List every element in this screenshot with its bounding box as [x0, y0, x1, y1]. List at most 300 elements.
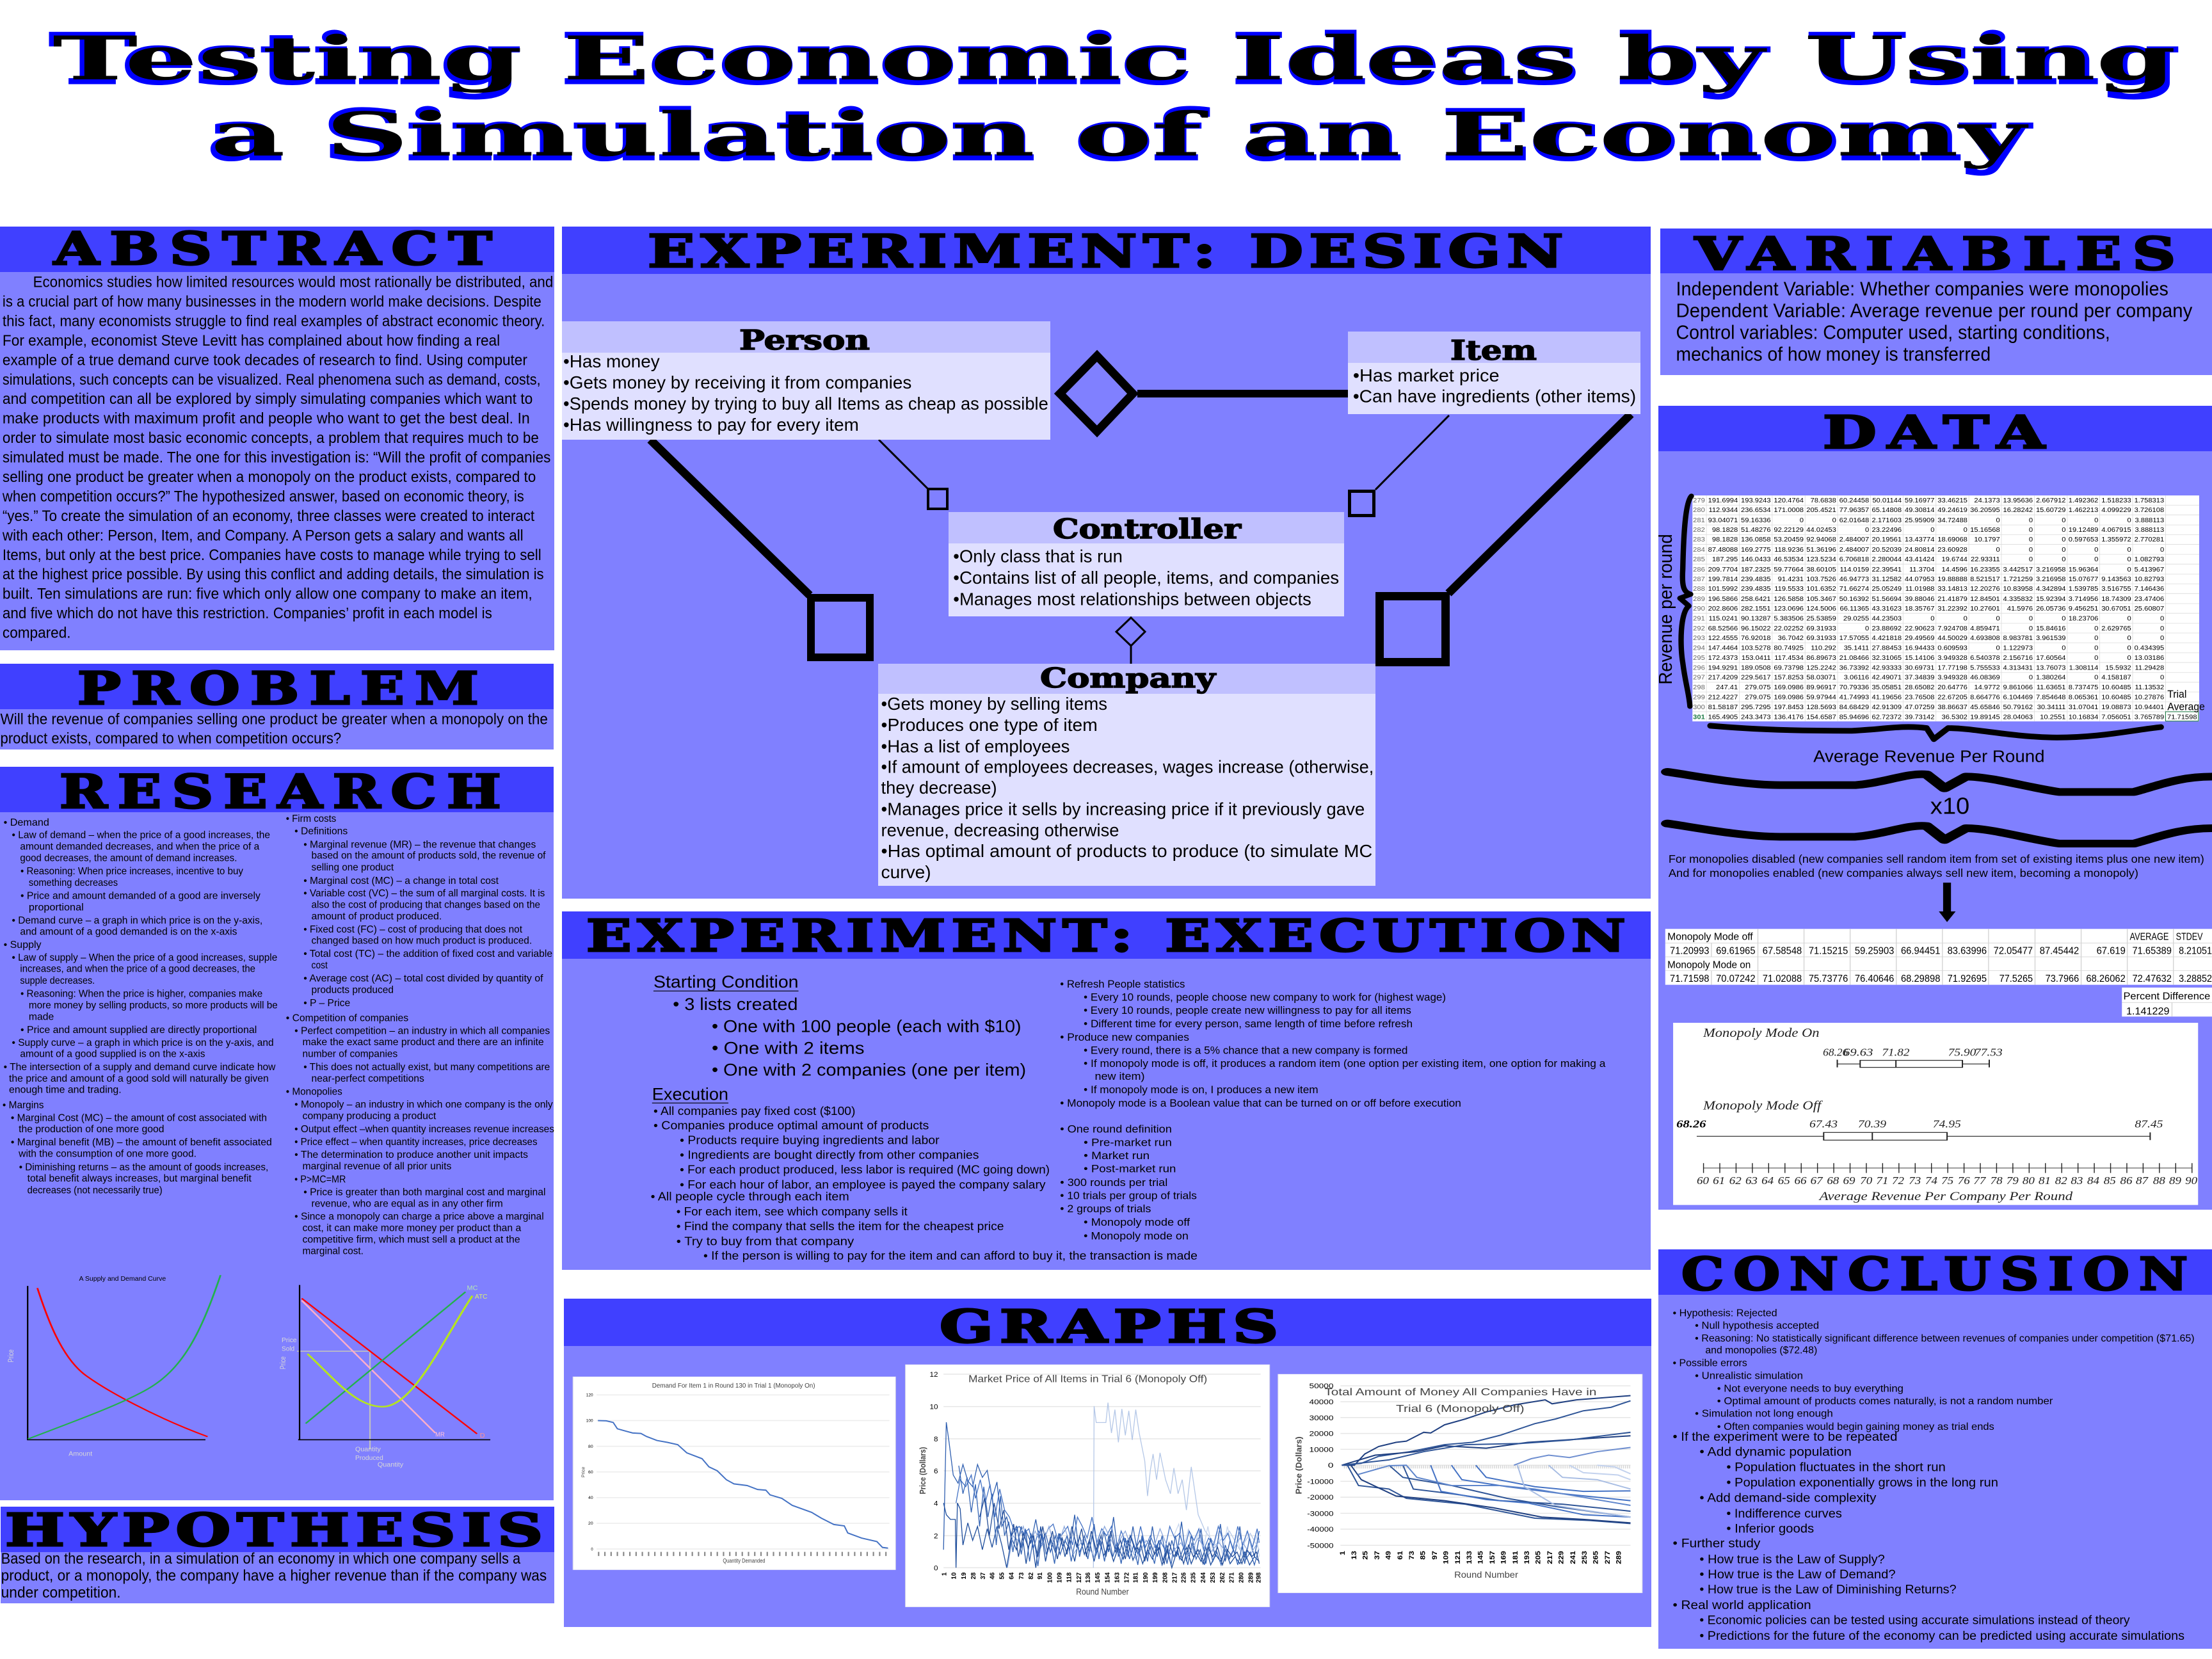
abstract body text: with each other: Person, Item, and Company. A Person gets a salary and wants all [2, 527, 524, 544]
spreadsheet: revenue per round: 0 [1930, 526, 1934, 534]
spreadsheet: revenue per round: 103.5278 [1741, 645, 1771, 652]
conclusion outline: hypothesis and errors [1673, 1307, 2195, 1432]
average revenue label with x10 braces: Average Revenue Per Round [1813, 747, 2045, 765]
conclusion outline: repeat, further study and applications: • Real world application [1673, 1598, 1811, 1612]
spreadsheet: revenue per round: 157.8253 [1774, 674, 1804, 682]
class box: controller: •Contains list of all people, items, and companies [953, 568, 1339, 588]
panel: graphs [564, 1299, 1651, 1627]
spreadsheet: revenue per round: 236.6534 [1741, 507, 1771, 514]
research notes right column: revenue, who are equal as in any other firm [312, 1198, 503, 1209]
table: trial averages: 59.25903 [1855, 945, 1894, 956]
conclusion outline: repeat, further study and applications: • Inferior goods [1726, 1521, 1814, 1535]
spreadsheet: revenue per round: 0 [2128, 654, 2131, 662]
research notes right column: make the exact same product and there are an infinite [303, 1036, 544, 1047]
chart: demand for item 1: 60 [588, 1470, 593, 1475]
research notes right column: marginal cost. [303, 1245, 364, 1256]
spreadsheet: revenue per round: 5.383506 [1774, 615, 1804, 623]
spreadsheet: revenue per round: 189.0508 [1741, 664, 1771, 671]
spreadsheet: revenue per round: 89.96917 [1806, 684, 1836, 691]
spreadsheet: revenue per round: 15.84616 [2036, 625, 2066, 632]
spreadsheet: revenue per round: 0 [2160, 546, 2164, 554]
spreadsheet: revenue per round: 4.158187 [2101, 674, 2131, 682]
research notes right column: • Monopoly – an industry in which one company is the only [294, 1098, 553, 1110]
conclusion outline: repeat, further study and applications: • Population exponentially grows in the long run [1726, 1475, 1998, 1489]
research notes right column: changed based on how much product is produced. [312, 934, 532, 946]
spreadsheet: revenue per round: 0 [2094, 645, 2098, 652]
spreadsheet: revenue per round: 0 [2094, 634, 2098, 642]
spreadsheet: revenue per round: 53.20459 [1774, 536, 1804, 543]
research notes left column: the price and amount of a good sold will naturally be given [9, 1072, 269, 1084]
box plot: average revenue per company per round: Average Revenue Per Company Per Round [1818, 1189, 2073, 1203]
spreadsheet: revenue per round: 291 [1693, 615, 1705, 623]
spreadsheet: revenue per round: 28.04063 [2003, 714, 2033, 721]
spreadsheet: revenue per round: 92.22129 [1774, 526, 1804, 534]
research notes right column: based on the amount of products sold, the revenue of [312, 849, 546, 861]
spreadsheet: revenue per round: 62.01648 [1839, 517, 1869, 524]
spreadsheet: revenue per round: 3.516755 [2101, 585, 2131, 593]
spreadsheet: revenue per round: 187.295 [1712, 556, 1738, 563]
spreadsheet: revenue per round: 258.6421 [1741, 595, 1771, 603]
chart: market price of all items: 91 [1037, 1572, 1044, 1580]
spreadsheet: revenue per round: 202.8606 [1708, 605, 1738, 613]
spreadsheet: revenue per round: 32.31065 [1872, 654, 1902, 662]
spreadsheet: revenue per round: 91.4231 [1778, 575, 1804, 583]
research notes left column: • Marginal benefit (MB) – the amount of benefit associated [11, 1136, 272, 1148]
spreadsheet: revenue per round: 0 [1865, 625, 1869, 632]
research heading: RESEARCH [60, 764, 511, 819]
spreadsheet: revenue per round: 3.714956 [2069, 595, 2098, 603]
spreadsheet: revenue per round: 295.7295 [1741, 703, 1771, 711]
spreadsheet: revenue per round: Trial [2167, 688, 2186, 700]
spreadsheet: revenue per round: 2.156716 [2003, 654, 2033, 662]
spreadsheet: revenue per round: 19.08873 [2101, 703, 2131, 711]
spreadsheet: revenue per round: 165.4905 [1708, 714, 1738, 721]
spreadsheet: revenue per round: 51.56694 [1872, 595, 1902, 603]
spreadsheet: revenue per round: 93.04071 [1708, 517, 1738, 524]
spreadsheet: revenue per round: 19.6744 [1942, 556, 1968, 563]
box plot: average revenue per company per round: 77 [1973, 1174, 1987, 1187]
spreadsheet: revenue per round: 19.88888 [1937, 575, 1968, 583]
spreadsheet: revenue per round: 1.380264 [2036, 674, 2066, 682]
spreadsheet: revenue per round: 59.16336 [1741, 517, 1771, 524]
chart: market price of all items: 55 [999, 1572, 1006, 1580]
panel: hypothesis [1, 1503, 554, 1603]
title [49, 19, 2179, 176]
simulation loop notes: • Market run [1084, 1150, 1150, 1162]
spreadsheet: revenue per round: 39.88046 [1905, 595, 1934, 603]
chart: total money of all companies: 133 [1466, 1551, 1473, 1564]
conclusion outline: repeat, further study and applications: • Add demand-side complexity [1699, 1491, 1877, 1505]
chart: market price of all items: 154 [1104, 1572, 1111, 1583]
spreadsheet: revenue per round: 136.0858 [1741, 536, 1771, 543]
spreadsheet: revenue per round: 24.80814 [1905, 546, 1934, 554]
spreadsheet: revenue per round: 191.6994 [1708, 497, 1738, 504]
spreadsheet: revenue per round: 51.36196 [1806, 546, 1836, 554]
chart: market price of all items: 208 [1162, 1572, 1169, 1583]
class box: person: •Has willingness to pay for every item [563, 415, 859, 435]
spreadsheet: revenue per round: 16.28242 [2003, 507, 2033, 514]
spreadsheet: revenue per round: 43.41424 [1905, 556, 1934, 563]
starting condition and execution notes: • All companies pay fixed cost ($100) [653, 1104, 855, 1118]
research notes left column: • The intersection of a supply and demand curve indicate how [4, 1061, 275, 1072]
research notes right column: • Price effect – when quantity increases, price decreases [294, 1136, 538, 1148]
research notes right column: products produced [312, 984, 394, 995]
spreadsheet: revenue per round: 18.69068 [1937, 536, 1968, 543]
table: trial averages: 71.02088 [1763, 974, 1802, 984]
chart: market price of all items: 64 [1009, 1572, 1016, 1580]
spreadsheet: revenue per round: 2.484007 [1839, 546, 1869, 554]
class box: company: curve) [881, 862, 931, 882]
simulation loop notes: new item) [1094, 1070, 1145, 1082]
chart: total money of all companies: 1 [1339, 1551, 1347, 1555]
spreadsheet: revenue per round: 33.46215 [1937, 497, 1968, 504]
chart: market price of all items: 73 [1018, 1572, 1025, 1580]
spreadsheet: revenue per round: 280 [1693, 507, 1705, 514]
research notes left column: made [29, 1011, 54, 1022]
class box: company: •If amount of employees decreases, wages increase (otherwise, [881, 757, 1374, 776]
spreadsheet: revenue per round: 1.122973 [2003, 645, 2033, 652]
research notes left column: • Price and amount demanded of a good are inversely [20, 890, 260, 901]
spreadsheet: revenue per round: 69.31933 [1806, 634, 1836, 642]
spreadsheet: revenue per round: 0 [1865, 526, 1869, 534]
spreadsheet: revenue per round: 44.07953 [1905, 575, 1934, 583]
box plot: average revenue per company per round: 70 [1860, 1174, 1873, 1187]
research notes right column: • P – Price [303, 997, 350, 1008]
chart: market price of all items: 298 [1256, 1572, 1263, 1583]
spreadsheet: revenue per round: 44.02453 [1806, 526, 1836, 534]
simulation loop notes: • Produce new companies [1060, 1031, 1189, 1043]
arrow: down to results table [1939, 883, 1955, 922]
chart: total money of all companies: -20000 [1307, 1494, 1333, 1502]
chart: total money of all companies: -50000 [1307, 1542, 1333, 1550]
box plot: average revenue per company per round: Monopoly Mode On [1703, 1025, 1820, 1039]
spreadsheet: revenue per round: 42.91309 [1872, 703, 1902, 711]
spreadsheet: revenue per round: 103.7526 [1806, 575, 1836, 583]
research notes left column: amount of a good supplied is on the x-axis [20, 1048, 205, 1059]
box plot: average revenue per company per round: 79 [2007, 1174, 2019, 1187]
spreadsheet: revenue per round: 1.721259 [2003, 575, 2033, 583]
spreadsheet: revenue per round: 289 [1693, 595, 1705, 603]
box plot: average revenue per company per round [1673, 1023, 2198, 1205]
abstract body text: at the highest price possible. By using this conflict and adding details, the simulation is [3, 566, 544, 583]
table: trial averages: 71.65389 [2132, 945, 2172, 956]
spreadsheet: revenue per round: 10.2551 [2040, 714, 2066, 721]
spreadsheet: revenue per round: 24.1373 [1974, 497, 2000, 504]
chart: total money of all companies: 25 [1361, 1551, 1369, 1560]
spreadsheet: revenue per round: 285 [1693, 556, 1705, 563]
research notes right column: • Since a monopoly can charge a price above a marginal [294, 1210, 544, 1222]
spreadsheet: revenue per round: 85.94696 [1839, 714, 1869, 721]
class box: person: •Gets money by receiving it from companies [563, 373, 911, 392]
chart: total money of all companies: 121 [1454, 1551, 1462, 1564]
spreadsheet: revenue per round: 1.355972 [2101, 536, 2131, 543]
spreadsheet: revenue per round: 28.65082 [1905, 684, 1934, 691]
research notes left column: more money by selling products, so more products will be [29, 999, 278, 1011]
spreadsheet: revenue per round: 209.7704 [1708, 566, 1738, 573]
panel: experiment design [562, 225, 1651, 899]
spreadsheet: revenue per round: 27.88453 [1872, 645, 1902, 652]
spreadsheet: revenue per round: 59.97944 [1806, 694, 1836, 701]
spreadsheet: revenue per round: 31.22392 [1937, 605, 1968, 613]
class box: company: •Gets money by selling items [881, 694, 1107, 714]
class box: controller: •Only class that is run [953, 547, 1123, 566]
spreadsheet: revenue per round: 171.0008 [1774, 507, 1804, 514]
spreadsheet: revenue per round: 120.4764 [1774, 497, 1804, 504]
chart: total money of all companies: 49 [1384, 1551, 1392, 1560]
chart: total money of all companies: 109 [1442, 1551, 1450, 1564]
abstract body text: when competition occurs?” The hypothesized answer, based on economic theory, is [2, 488, 524, 505]
chart: monopoly price and cost curves: Price [279, 1356, 288, 1369]
class box: company: •Produces one type of item [881, 715, 1098, 735]
spreadsheet: revenue per round [1692, 495, 2205, 721]
spreadsheet: revenue per round: 295 [1693, 654, 1705, 662]
spreadsheet: revenue per round: 4.313431 [2003, 664, 2033, 671]
spreadsheet: revenue per round: 105.3467 [1806, 595, 1836, 603]
box plot: average revenue per company per round: 82 [2055, 1174, 2067, 1187]
spreadsheet: revenue per round: 38.60105 [1806, 566, 1836, 573]
abstract body text: compared. [3, 625, 71, 641]
chart: market price of all items: 12 [929, 1370, 938, 1379]
box plot: average revenue per company per round: 85 [2104, 1174, 2116, 1187]
chart: total money of all companies: 30000 [1310, 1414, 1333, 1422]
spreadsheet: revenue per round: 5.755533 [1970, 664, 2000, 671]
chart: market price of all items: 217 [1171, 1572, 1178, 1583]
chart: market price of all items: 8 [934, 1436, 938, 1443]
spreadsheet: revenue per round: 59.16977 [1905, 497, 1934, 504]
hypothesis text: product, or a monopoly, the company have a higher revenue than if the company was [1, 1567, 547, 1584]
research notes right column: cost [312, 959, 328, 971]
chart: total money of all companies: 20000 [1310, 1430, 1333, 1438]
chart: total money of all companies: 145 [1477, 1551, 1484, 1564]
chart: market price of all items: 118 [1066, 1572, 1073, 1583]
spreadsheet: revenue per round: 22.90623 [1905, 625, 1934, 632]
spreadsheet: revenue per round: 217.4209 [1708, 674, 1738, 682]
class box: company: they decrease) [881, 778, 997, 797]
box plot: average revenue per company per round: 84 [2087, 1174, 2099, 1187]
spreadsheet: revenue per round: 0 [2128, 517, 2131, 524]
chart: market price of all items: 10 [929, 1403, 938, 1411]
box plot: average revenue per company per round: 67 [1811, 1174, 1823, 1187]
chart: demand for item 1: 40 [588, 1496, 593, 1500]
spreadsheet: revenue per round: 101.5992 [1708, 585, 1738, 593]
research notes right column: near-perfect competitions [312, 1072, 424, 1084]
chart: market price of all items: Round Number [1076, 1587, 1129, 1596]
spreadsheet: revenue per round: 17.77198 [1937, 664, 1968, 671]
spreadsheet: revenue per round: 19.89145 [1970, 714, 2000, 721]
spreadsheet: revenue per round: 0 [2160, 674, 2164, 682]
spreadsheet: revenue per round: 147.4464 [1708, 645, 1738, 652]
spreadsheet: revenue per round: 86.89673 [1806, 654, 1836, 662]
spreadsheet: revenue per round: 4.342894 [2036, 585, 2066, 593]
spreadsheet: revenue per round: 68.52566 [1708, 625, 1738, 632]
spreadsheet: revenue per round: 3.949328 [1937, 654, 1968, 662]
spreadsheet: revenue per round: 25.05249 [1872, 585, 1902, 593]
spreadsheet: revenue per round: 3.216958 [2036, 575, 2066, 583]
box plot: average revenue per company per round: 69 [1843, 1174, 1855, 1187]
research notes left column: increases, and when the price of a good decreases, the [20, 963, 255, 974]
spreadsheet: revenue per round: 10.16834 [2069, 714, 2098, 721]
spreadsheet: revenue per round: 35.1411 [1844, 645, 1869, 652]
hypothesis text: under competition. [1, 1584, 121, 1601]
spreadsheet: revenue per round: 19.12489 [2069, 526, 2098, 534]
spreadsheet: revenue per round: 49.30814 [1905, 507, 1934, 514]
spreadsheet: revenue per round: 298 [1693, 684, 1705, 691]
simulation loop notes: • 2 groups of trials [1060, 1203, 1151, 1215]
chart: demand for item 1: 120 [586, 1393, 593, 1397]
spreadsheet: revenue per round: 22.67205 [1937, 694, 1968, 701]
box plot: average revenue per company per round: 62 [1729, 1174, 1742, 1187]
abstract body text: Items, but only at the best price. Companies have costs to manage while trying to sell [3, 547, 541, 564]
box plot: average revenue per company per round: 90 [2185, 1174, 2198, 1187]
class box: person: •Spends money by trying to buy all Items as cheap as possible [563, 394, 1048, 413]
spreadsheet: revenue per round: 212.4227 [1708, 694, 1738, 701]
panel: experiment execution [562, 911, 1651, 1270]
spreadsheet: revenue per round: 10.83958 [2003, 585, 2033, 593]
starting condition and execution notes: • For each hour of labor, an employee is payed the company salary [680, 1178, 1046, 1191]
starting condition and execution notes [651, 972, 1198, 1262]
panel: variables [1660, 227, 2212, 375]
spreadsheet: revenue per round: 294 [1693, 645, 1705, 652]
chart: total money of all companies: -10000 [1307, 1478, 1333, 1486]
box plot: average revenue per company per round: 61 [1713, 1174, 1725, 1187]
research notes right column: amount of product produced. [312, 910, 442, 922]
chart: total money of all companies: Round Number [1454, 1569, 1518, 1580]
table: trial averages: 71.92695 [1948, 974, 1987, 984]
spreadsheet: revenue per round: 3.961539 [2036, 634, 2066, 642]
spreadsheet: revenue per round: 243.3473 [1741, 714, 1771, 721]
spreadsheet: revenue per round: 47.07259 [1905, 703, 1934, 711]
spreadsheet: revenue per round: 25.53859 [1806, 615, 1836, 623]
research notes right column: • Perfect competition – an industry in which all companies [294, 1025, 550, 1036]
spreadsheet: revenue per round: 301 [1693, 714, 1705, 721]
research notes left column: something decreases [29, 877, 118, 888]
starting condition and execution notes: • Products require buying ingredients and labor [680, 1134, 940, 1147]
research notes left column: with the consumption of one more good. [18, 1148, 196, 1159]
spreadsheet: revenue per round: 0 [2029, 536, 2033, 543]
spreadsheet: revenue per round: 279 [1693, 497, 1705, 504]
box plot: average revenue per company per round: 64 [1761, 1174, 1774, 1187]
chart: total money of all companies: 0 [1328, 1462, 1333, 1470]
panel: graphs: Demand For Item 1 in Round 130 in Trial 1 (Monopoly On) [652, 1382, 815, 1389]
spreadsheet: revenue per round: 16.23355 [1970, 566, 2000, 573]
conclusion outline: hypothesis and errors: • Null hypothesis accepted [1695, 1320, 1819, 1331]
starting condition and execution notes: • 3 lists created [673, 995, 797, 1014]
table: trial averages: 72.47632 [2132, 974, 2172, 984]
chart: total money of all companies: 85 [1419, 1551, 1427, 1560]
spreadsheet: revenue per round: 7.854648 [2036, 694, 2066, 701]
box plot: average revenue per company per round: Monopoly Mode Off [1703, 1098, 1823, 1112]
chart: monopoly price and cost curves: ATC [475, 1294, 488, 1300]
abstract body text: is a crucial part of how many businesses in the modern world make decisions. Despite [3, 293, 541, 310]
chart: total money of all companies: 181 [1511, 1551, 1519, 1564]
starting condition and execution notes: • One with 2 items [712, 1039, 865, 1057]
class box: item: Item [1450, 335, 1537, 366]
spreadsheet: revenue per round: 34.72488 [1937, 517, 1968, 524]
chart: supply and demand curve: Amount [68, 1450, 93, 1457]
spreadsheet: revenue per round: 229.5617 [1741, 674, 1771, 682]
chart: monopoly price and cost curves [279, 1285, 490, 1468]
class box: company: revenue, decreasing otherwise [881, 820, 1119, 840]
spreadsheet: revenue per round: 23.22496 [1872, 526, 1902, 534]
research notes right column: • Monopolies [286, 1086, 342, 1097]
spreadsheet: revenue per round: 0.609593 [1937, 645, 1968, 652]
abstract body text: For example, economist Steve Levitt has complained about how finding a real [3, 332, 500, 349]
spreadsheet: revenue per round: 0 [1800, 517, 1804, 524]
experiment design heading: EXPERIMENT: DESIGN [648, 225, 1569, 278]
research notes right column: company producing a product [303, 1110, 436, 1121]
abstract body text: “yes.” To create the simulation of an economy, three classes were created to interact [3, 508, 534, 525]
spreadsheet: revenue per round: 0 [2062, 536, 2066, 543]
simulation loop notes: • 10 trials per group of trials [1060, 1189, 1197, 1201]
starting condition and execution notes: • Find the company that sells the item for the cheapest price [677, 1219, 1004, 1233]
starting condition and execution notes: • One with 2 companies (one per item) [712, 1061, 1026, 1079]
spreadsheet: revenue per round: 30.34111 [2037, 703, 2066, 711]
problem text [1, 711, 548, 748]
spreadsheet: revenue per round: 90.13287 [1741, 615, 1771, 623]
spreadsheet: revenue per round: 8.065361 [2069, 694, 2098, 701]
spreadsheet: revenue per round: 4.335832 [2003, 595, 2033, 603]
spreadsheet: revenue per round: 287 [1693, 575, 1705, 583]
spreadsheet: revenue per round: 4.067915 [2101, 526, 2131, 534]
spreadsheet: revenue per round: 9.861066 [2003, 684, 2033, 691]
starting condition and execution notes: • Ingredients are bought directly from other companies [680, 1148, 979, 1162]
spreadsheet: revenue per round: 87.48088 [1708, 546, 1738, 554]
spreadsheet: revenue per round: 44.50029 [1937, 634, 1968, 642]
box plot: average revenue per company per round: 72 [1892, 1174, 1904, 1187]
research notes left column: and amount of a good demanded is on the x-axis [20, 926, 237, 937]
data heading: DATA [1823, 406, 2056, 459]
chart: total money of all companies: 253 [1581, 1551, 1589, 1564]
spreadsheet: revenue per round: 11.3704 [1909, 566, 1934, 573]
box plot: average revenue per company per round: 87 [2136, 1174, 2149, 1187]
spreadsheet: revenue per round: 8.737475 [2069, 684, 2098, 691]
spreadsheet: revenue per round: 279.075 [1745, 694, 1771, 701]
box plot: average revenue per company per round: 65 [1778, 1174, 1790, 1187]
research notes right column: • Output effect –when quantity increases revenue increases [294, 1123, 554, 1134]
spreadsheet: revenue per round: 14.4596 [1942, 566, 1968, 573]
class box: item [1348, 332, 1640, 414]
spreadsheet: revenue per round: 4.099229 [2101, 507, 2131, 514]
conclusion outline: repeat, further study and applications: • How true is the Law of Demand? [1699, 1567, 1896, 1581]
spreadsheet: revenue per round: 3.765789 [2135, 714, 2164, 721]
table: trial averages: 70.07242 [1716, 974, 1756, 984]
spreadsheet: revenue per round: 71.71598 [2167, 714, 2197, 721]
conclusion outline: hypothesis and errors: • Hypothesis: Rejected [1673, 1307, 1777, 1318]
spreadsheet: revenue per round: 194.9291 [1708, 664, 1738, 671]
spreadsheet: revenue per round: 0 [2128, 634, 2131, 642]
table: trial averages: 83.63996 [1948, 945, 1987, 956]
spreadsheet: revenue per round: 20.19561 [1872, 536, 1902, 543]
abstract heading: ABSTRACT [53, 222, 502, 275]
spreadsheet: revenue per round: 196.5866 [1708, 595, 1738, 603]
spreadsheet: revenue per round: 0 [2062, 645, 2066, 652]
spreadsheet: revenue per round: 8.664776 [1970, 694, 2000, 701]
research notes left column: • Marginal Cost (MC) – the amount of cost associated with [11, 1112, 267, 1123]
spreadsheet: revenue per round: 7.056051 [2101, 714, 2131, 721]
spreadsheet: revenue per round: 23.60928 [1937, 546, 1968, 554]
box plot: average revenue per company per round: 77.53 [1975, 1046, 2003, 1058]
research notes left column: amount demanded decreases, and when the price of a [20, 840, 259, 852]
chart: market price of all items: 199 [1152, 1572, 1159, 1583]
spreadsheet: revenue per round: 22.39541 [1872, 566, 1902, 573]
spreadsheet: revenue per round: 112.9344 [1708, 507, 1738, 514]
panel: data [1655, 406, 2212, 1210]
spreadsheet: revenue per round: 4.421818 [1872, 634, 1902, 642]
chart: monopoly price and cost curves: Produced [355, 1455, 383, 1461]
spreadsheet: revenue per round: 11.63651 [2037, 684, 2066, 691]
spreadsheet: revenue per round: 0 [2062, 546, 2066, 554]
spreadsheet: revenue per round: 20.52039 [1872, 546, 1902, 554]
